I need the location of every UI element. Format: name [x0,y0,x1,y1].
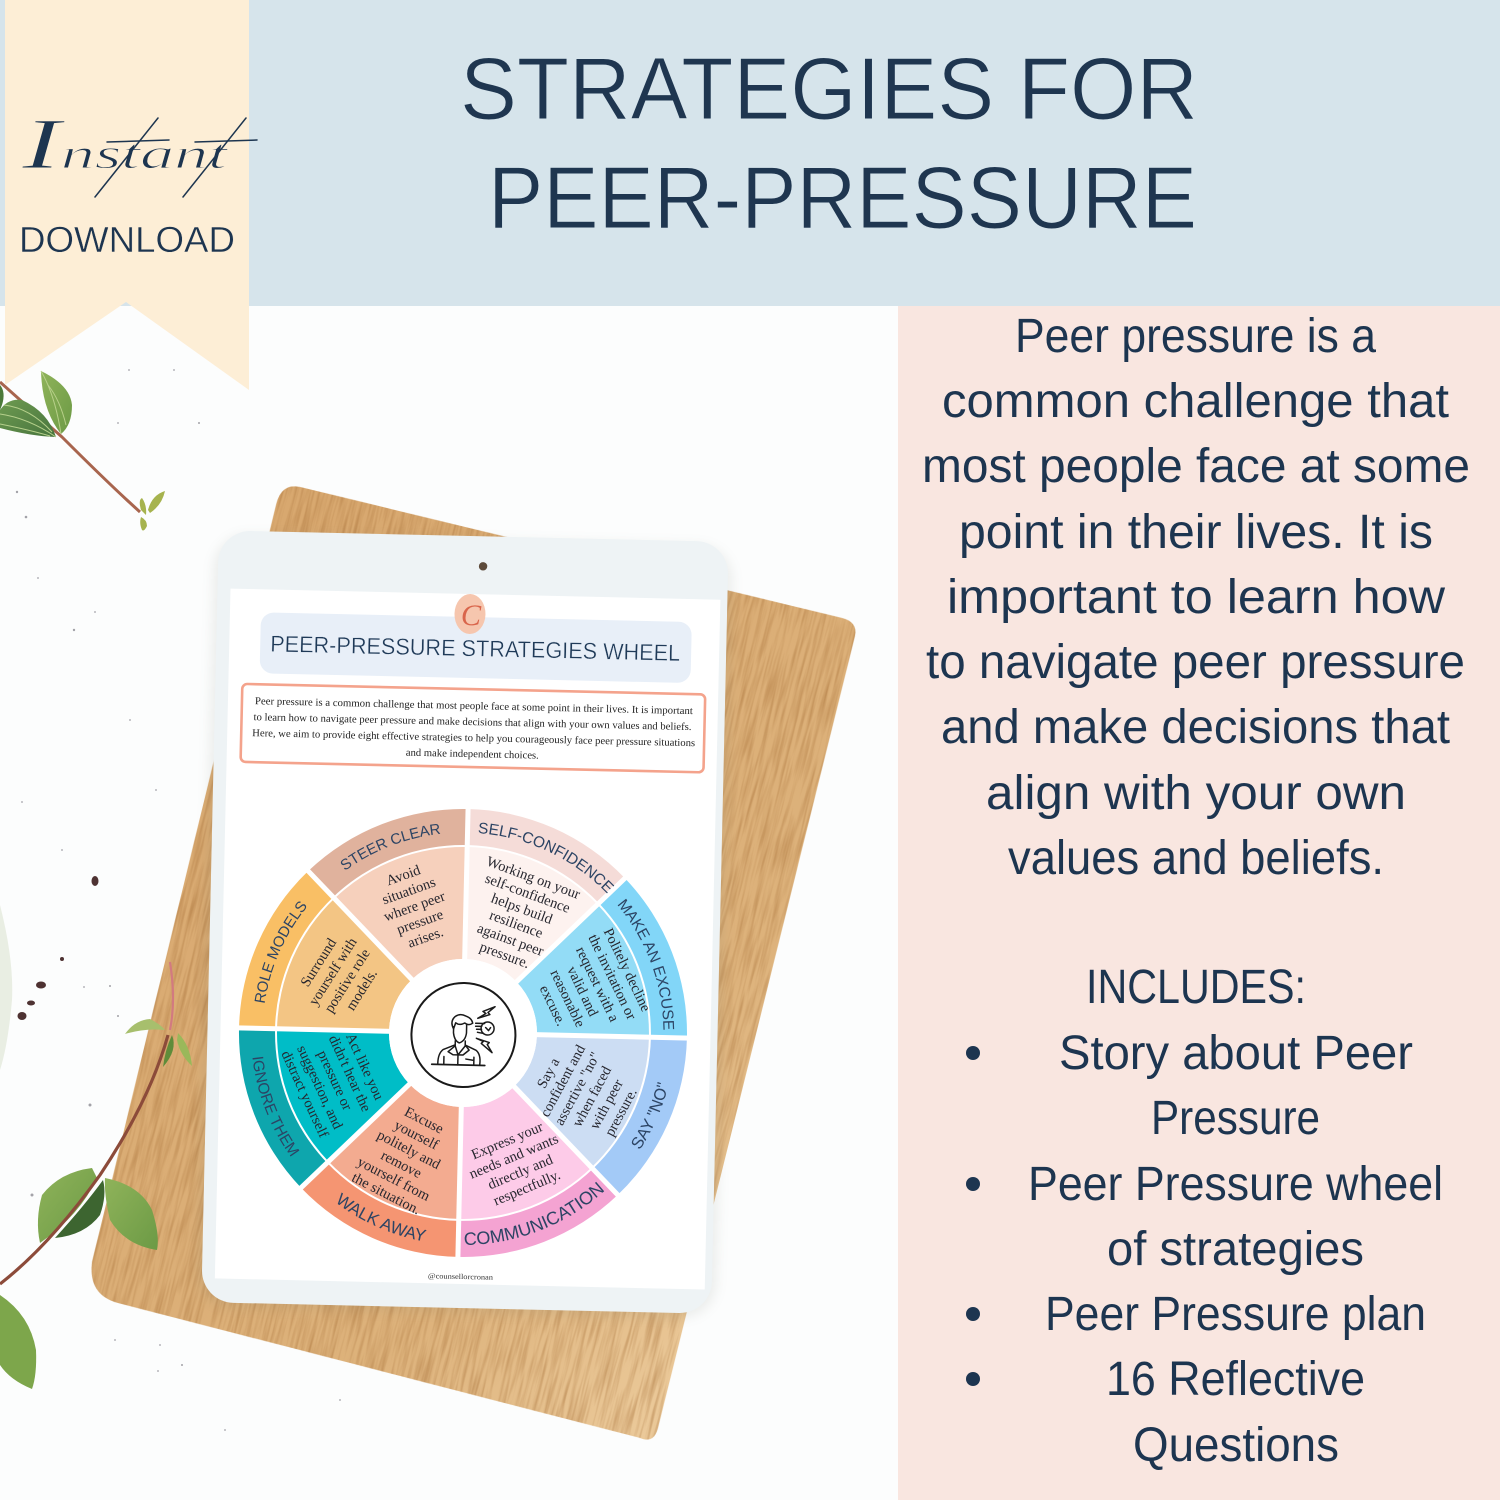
wedge text: ignore them: suggestion, and [293,1043,346,1132]
wedge text: self-confidence: against peer [475,921,546,960]
band label: make an excuse: MAKE AN EXCUSE [618,898,674,1030]
tablet shadow [197,534,733,1318]
band label: ignore them: IGNORE THEM [252,1056,300,1156]
wedge text: ignore them: Act like you [342,1031,387,1103]
tablet device [202,531,728,1313]
wedge text: walk away [347,1095,463,1220]
wedge text: say no [523,1034,648,1152]
leaf top [41,371,72,434]
intro box: Here, we aim to provide eight effective strategies to help you courageously face peer pressure situations [252,728,695,749]
wedge text: say no: assertive "no" [552,1050,604,1128]
wedge text: walk away: the situation. [349,1170,423,1218]
description paragraph: values and beliefs. [1008,832,1384,885]
center hub [387,957,539,1109]
strategies wheel [238,809,687,1257]
description paragraph: point in their lives. It is [959,506,1433,559]
wedge text: walk away: politely and [374,1127,444,1173]
wedge text: communication: Express your [469,1119,546,1163]
band label: role models: ROLE MODELS [254,902,306,1003]
description paragraph: common challenge that [942,375,1449,428]
includes list: of strategies [1107,1223,1364,1276]
leaf bottom [0,1295,36,1389]
wedge text: steer clear: pressure [395,907,446,938]
wedge text: make an excuse: the invitation or [585,932,639,1023]
sector: self-confidence [464,809,626,984]
wedge text: communication [460,1115,574,1214]
small leaves [125,1019,165,1034]
wedge text: self-confidence: resilience [487,908,545,942]
wedge text: self-confidence: helps build [489,891,555,928]
wedge text: ignore them [278,1021,391,1140]
wedge text: self-confidence [455,854,582,980]
leaf large right [105,1178,158,1250]
includes list [966,1027,1443,1472]
wedge text: communication: needs and wants [467,1131,561,1183]
includes list: Questions [1133,1419,1339,1472]
script word [20,104,257,197]
wedge text: walk away: remove [378,1148,424,1182]
wedge text: make an excuse: Politely decline [600,926,654,1014]
wedge text: steer clear: where peer [382,889,448,925]
sector: say no [512,1034,687,1196]
stem [0,1035,168,1284]
description paragraph: align with your own [986,767,1406,820]
wedge text: steer clear: Avoid [384,862,423,889]
logo badge [454,594,486,634]
sector: role models [239,870,414,1032]
script word: I nstant [20,104,229,184]
wedge text: say no: confident and [537,1042,589,1120]
wedge text: make an excuse: valid and [563,964,601,1020]
wedge text: make an excuse: reasonable [547,967,588,1030]
social handle: @counsellorcronan [428,1271,493,1282]
wedge text: role models: Surround [298,935,340,990]
main title: PEER-PRESSURE [488,148,1197,247]
wedge text: say no: when faced [570,1063,615,1130]
description paragraph: to navigate peer pressure [926,636,1465,689]
includes list: Peer Pressure plan [1045,1288,1426,1341]
wedge text: make an excuse [525,925,654,1051]
photo background [0,300,898,1500]
wedge text: say no: Say a [534,1055,564,1091]
wedge text: ignore them: distract yourself [278,1048,331,1140]
leaf large left [38,1168,97,1243]
wedge text: say no: pressure. [602,1086,641,1139]
wedge text: say no: with peer [587,1077,627,1132]
wedge text: ignore them: didn't hear the [325,1033,374,1114]
icon: stressed person [432,1005,495,1066]
wheel heading: PEER-PRESSURE STRATEGIES WHEEL [270,631,681,666]
wedge text: communication: directly and [486,1152,556,1193]
description paragraph: most people face at some [922,440,1470,493]
heading pill [260,612,692,683]
band label: steer clear: STEER CLEAR [340,824,440,870]
band label: walk away: WALK AWAY [338,1192,427,1241]
instant download ribbon [5,0,257,390]
wedge text: steer clear: situations [380,874,438,908]
main title [460,39,1198,247]
logo badge: C [461,599,482,632]
leaf edge [0,385,4,410]
sector: communication [385,1071,618,1304]
includes list: Pressure [1151,1092,1320,1145]
intro box: and make independent choices. [406,748,539,762]
includes list: Peer Pressure wheel [1028,1158,1443,1211]
camera dot [479,562,487,571]
sprout [140,491,165,530]
includes list: 16 Reflective [1106,1353,1365,1406]
includes list: Story about Peer [1059,1027,1413,1080]
includes heading: INCLUDES: [1086,961,1306,1014]
main title: STRATEGIES FOR [460,39,1198,138]
download word: DOWNLOAD [19,219,235,260]
band label: self-confidence: SELF-CONFIDENCE [478,822,614,894]
description paragraph [922,310,1470,885]
wedge text: ignore them: pressure or [314,1048,355,1113]
band label: communication: COMMUNICATION [464,1182,604,1245]
wedge text: steer clear: arises. [406,924,446,952]
wooden tray [0,307,1079,1500]
wedge text: self-confidence: pressure. [477,939,532,972]
wedge text: role models [292,925,390,1027]
band label: say no: SAY "NO" [632,1082,666,1148]
wedge text: role models: models. [343,967,381,1014]
vase edge [0,905,12,1070]
description paragraph: and make decisions that [941,701,1450,754]
wedge text: self-confidence: self-confidence [483,871,572,917]
tablet body [201,530,729,1314]
leaf dark [55,1180,104,1238]
tablet screen [215,589,720,1290]
wedge text: walk away: Excuse [401,1104,446,1137]
wedge text: make an excuse: request with a [572,944,622,1025]
wedge text: role models: yourself with [306,934,361,1009]
wedge text: make an excuse: excuse. [536,983,569,1029]
wedge text: self-confidence: Working on your [484,854,582,903]
intro box: Peer pressure is a common challenge that most people face at some point in their lives. It is important [255,696,693,717]
intro box [241,684,705,772]
wedge text: communication: respectfully. [491,1167,563,1209]
sector: ignore them [192,955,425,1188]
wedge text: role models: positive role [322,946,374,1016]
sector: make an excuse [501,878,734,1111]
plant top left [0,371,165,530]
wedge text: walk away: yourself [391,1117,441,1154]
sector: steer clear [308,762,541,995]
description paragraph: important to learn how [947,571,1445,624]
header band [0,0,1500,306]
intro box: to learn how to navigate peer pressure and make decisions that align with your own values and beliefs. [253,712,692,733]
leaf middle [0,400,56,437]
wedge text: steer clear [371,857,459,956]
wedge text: walk away: yourself from [355,1154,433,1205]
sector: walk away [300,1082,462,1257]
right description panel [898,306,1500,1500]
description paragraph: Peer pressure is a [1015,310,1376,363]
plant lower left [0,962,192,1389]
